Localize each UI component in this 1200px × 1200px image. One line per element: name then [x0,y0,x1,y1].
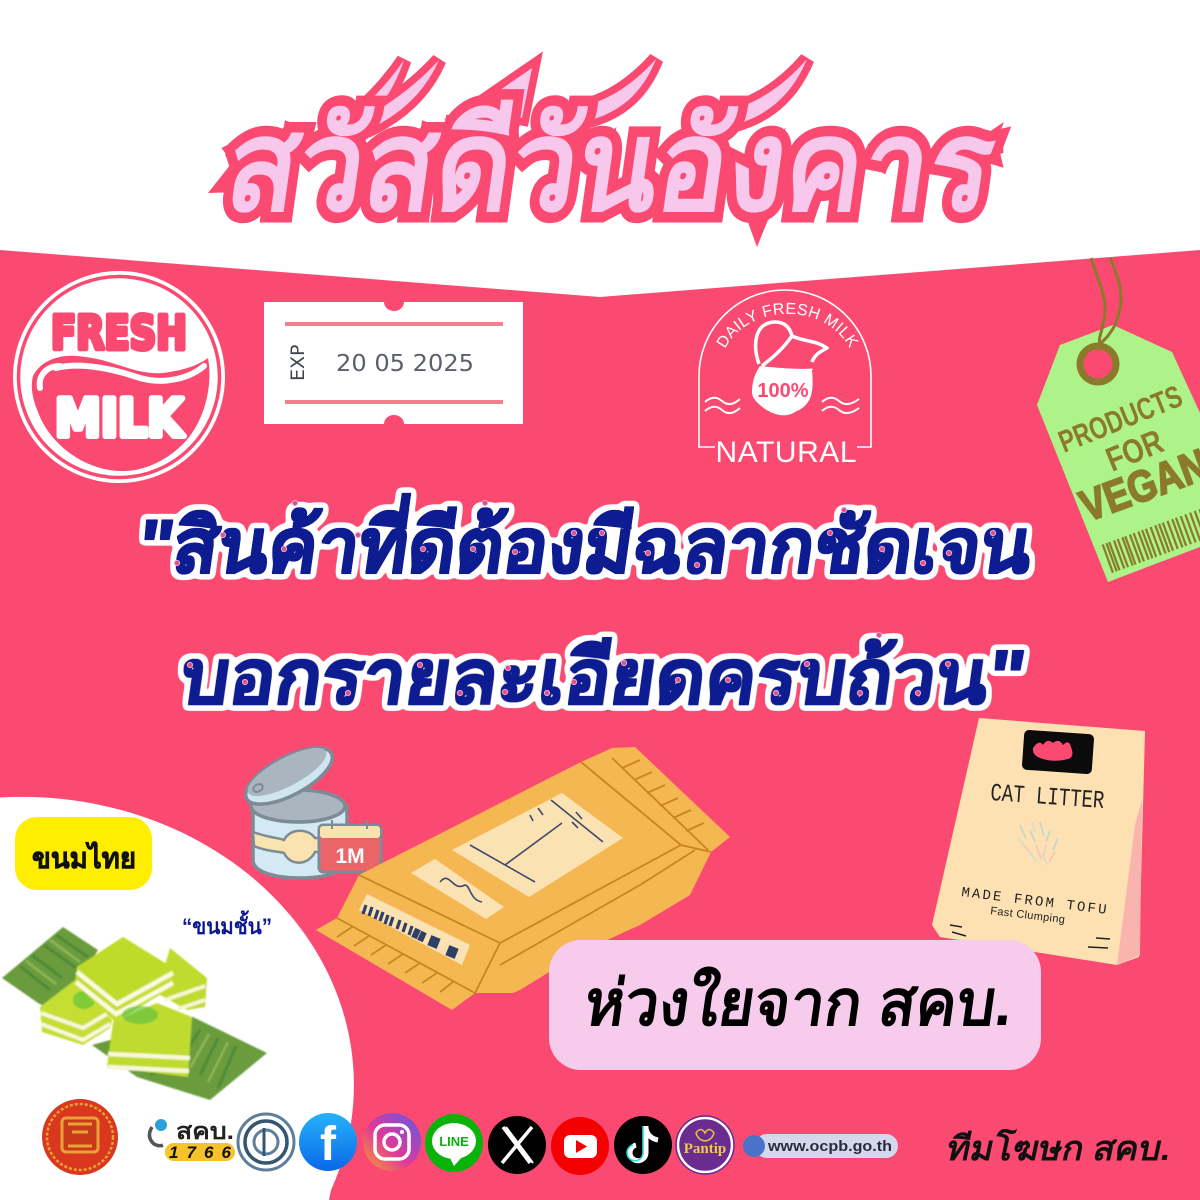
illustration: cat litter bag [932,718,1145,965]
waves [705,398,859,413]
footer: line: LINE [439,1134,469,1149]
footer: x [488,1116,546,1174]
main message [133,493,1039,719]
pink background panel [0,250,1200,1200]
natural label: NATURAL [716,436,856,469]
footer: ocpb seal [42,1099,118,1175]
icon: can with 1 month calendar: 1M [335,845,365,868]
banana leaf [2,927,98,1015]
message line 2: บอกรายละเอียดครบถ้วน" [176,635,1031,719]
calendar [319,825,381,872]
layered dessert on banana leaf [2,927,267,1100]
price tag: products for vegan [1037,258,1200,582]
callout: care from OCPB [549,940,1041,1070]
100 percent: 100% [757,380,809,402]
can lid [238,737,340,815]
thai sweets label [15,817,152,890]
back cake [157,948,207,1010]
footer: hotline 1766: สคบ. [176,1118,234,1144]
footer: hotline 1766 [149,1118,235,1162]
milk jug [752,366,813,415]
can label band [253,831,320,863]
badge: fresh milk [13,271,225,483]
footer: pantip [676,1116,734,1174]
bag side fold [1117,800,1142,965]
footer: facebook: f [320,1118,337,1171]
tag string [1091,258,1121,344]
fresh wordmark: FRESH [51,306,187,360]
message line 1: "สินค้าที่ดีต้องมีฉลากชัดเจน [133,493,1039,588]
footer: youtube [551,1117,609,1175]
arc text: DAILY FRESH MILK [716,302,859,348]
tag text [1054,378,1200,531]
footer: website pill [743,1134,898,1158]
tag barcode [1103,509,1200,573]
milk wordmark: MILK [55,389,185,449]
layered dessert caption: “ขนมชั้น” [182,910,272,939]
expiry date: 20 05 2025 [336,349,474,377]
footer: instagram [363,1113,421,1171]
footer: cpb logo [238,1114,294,1170]
expiry ticket [264,302,523,424]
tag hole [1080,346,1116,382]
litter grains [1018,822,1058,865]
bag made from tofu: MADE FROM TOFU [960,885,1107,919]
logo: daily fresh milk natural [698,289,872,469]
tag text: FOR [1101,422,1169,479]
front cake [107,1003,192,1077]
bag handle [1022,730,1094,774]
white corner circle [0,797,354,1200]
pouch small label [411,859,504,919]
footer: facebook [299,1113,357,1171]
footer: website pill: www.ocpb.go.th [767,1138,892,1155]
footer: pantip: Pantip [684,1141,726,1157]
bag fast clumping: Fast Clumping [990,905,1066,926]
thai sweets label: ขนมไทย [32,841,136,875]
milk wave and curl [40,366,204,388]
left cake [40,980,112,1045]
team signature: ทีมโฆษก สคบ. [943,1128,1176,1168]
footer: tiktok [614,1116,672,1174]
footer: line [425,1114,483,1172]
bag title: CAT LITTER [989,779,1105,816]
milk splash bowl [32,356,209,471]
icon: can with 1 month calendar [238,737,381,878]
pouch barcode [359,894,470,965]
top cake [75,937,173,1022]
illustration: kraft food pouch [316,747,730,1010]
footer: hotline 1766: 1766 [169,1143,232,1162]
title: สวัสดีวันอังคาร [218,96,1003,238]
pouch main label [452,793,623,897]
callout: care from OCPB: ห่วงใยจาก สคบ. [580,965,1018,1039]
exp label: EXP [287,345,309,381]
